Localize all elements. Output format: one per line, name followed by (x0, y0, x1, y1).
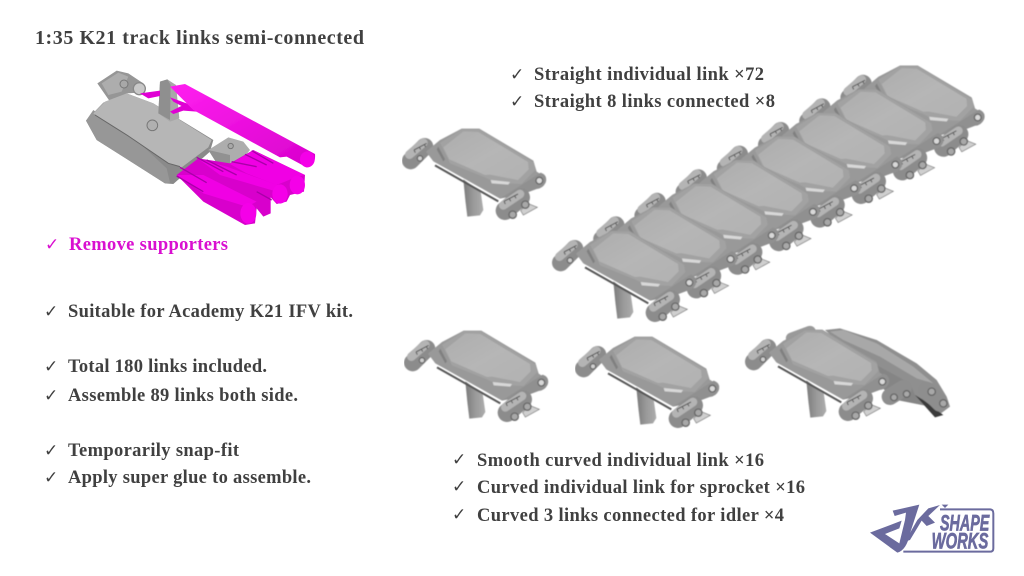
curved link labels: ✓ (452, 477, 466, 497)
solid rod mass (177, 150, 305, 225)
curved link labels: Smooth curved individual link ×16 (477, 451, 764, 471)
compatibility note: Suitable for Academy K21 IFV kit. (68, 302, 353, 322)
curved 3 links connected (752, 328, 950, 419)
curved link labels (452, 450, 805, 526)
curved link labels: ✓ (452, 505, 466, 525)
curved link labels: ✓ (452, 450, 466, 470)
compatibility note: ✓ (44, 302, 58, 322)
curved link labels: Curved individual link for sprocket ×16 (477, 478, 805, 498)
assembly notes: Apply super glue to assemble. (68, 468, 311, 488)
curved link labels: Curved 3 links connected for idler ×4 (477, 506, 784, 526)
smooth curved individual link (411, 331, 548, 420)
rear curved links (792, 328, 950, 417)
straight link labels: Straight individual link ×72 (534, 65, 764, 85)
assembly notes (44, 441, 311, 488)
link count notes: ✓ (44, 357, 58, 377)
straight 8 links connected (559, 65, 985, 320)
magenta supporters (140, 84, 315, 225)
assembly notes: Temporarily snap-fit (68, 441, 240, 461)
straight individual link (409, 129, 546, 218)
straight link labels: ✓ (510, 65, 524, 85)
link count notes: ✓ (44, 386, 58, 406)
supporters note: ✓ (45, 235, 59, 255)
straight link labels: ✓ (510, 92, 524, 112)
logo: Shape Works: SHAPE (940, 511, 990, 536)
assembly notes: ✓ (44, 468, 58, 488)
logo: Shape Works: WORKS (932, 528, 989, 553)
link count notes: Total 180 links included. (68, 357, 267, 377)
straight link labels (510, 65, 775, 112)
gray link body (86, 71, 250, 184)
straight link labels: Straight 8 links connected ×8 (534, 92, 775, 112)
curved link for sprocket (582, 337, 719, 426)
link count notes: Assemble 89 links both side. (68, 386, 298, 406)
link count notes (44, 357, 298, 406)
assembly notes: ✓ (44, 441, 58, 461)
title: 1:35 K21 track links semi-connected (35, 27, 364, 49)
supporters note: Remove supporters (69, 235, 228, 255)
figure: link with magenta supporters (86, 71, 315, 225)
logo: Shape Works (870, 505, 993, 553)
